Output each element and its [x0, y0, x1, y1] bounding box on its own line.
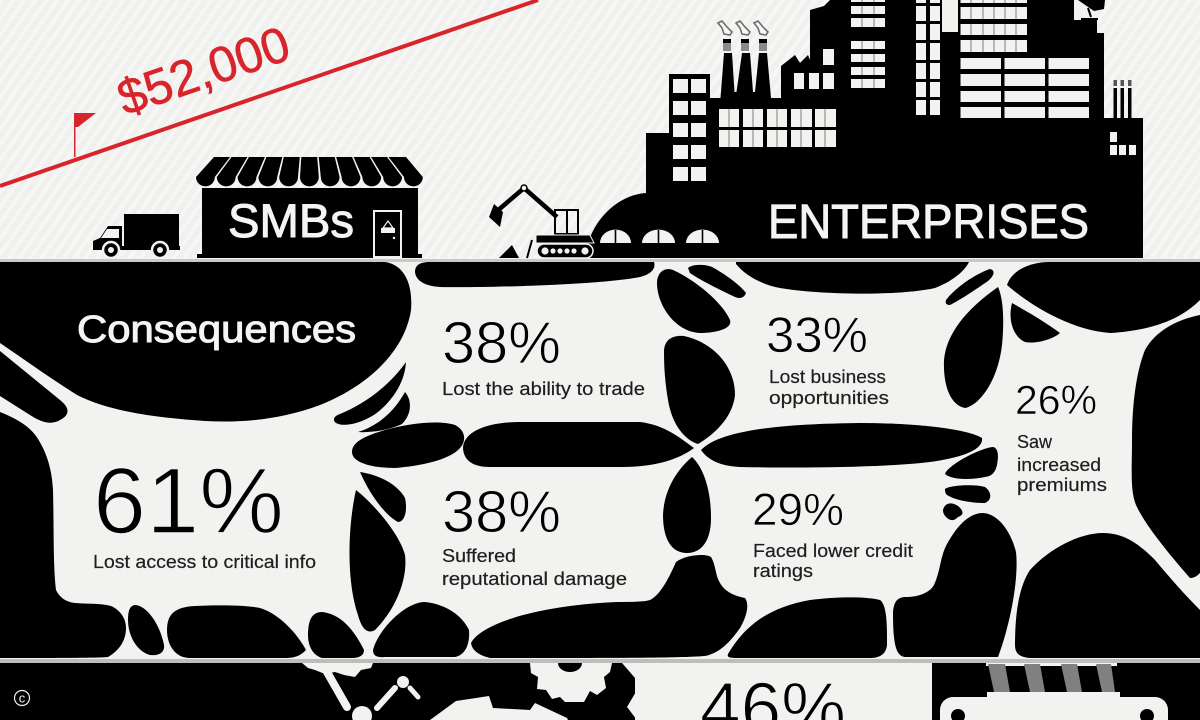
skyline windows — [600, 0, 1136, 243]
stat: 33% lost business opportunities: 33% — [766, 307, 868, 363]
large gear cut-out — [430, 696, 568, 720]
exhaust pipes — [1114, 80, 1132, 118]
label: SMBs: SMBs — [228, 194, 354, 247]
stat label: Faced lower credit — [753, 540, 913, 561]
off-white area edge — [622, 663, 637, 720]
icon: enterprise city skyline — [585, 0, 1143, 258]
shop awning — [196, 157, 423, 186]
stat label — [753, 540, 913, 581]
shop body — [202, 188, 418, 255]
stat: 29% faced lower credit ratings — [752, 484, 913, 581]
copyright mark — [14, 690, 30, 706]
stat: 26% saw increased premiums: 26% — [1015, 377, 1097, 423]
stat: 38% suffered reputational damage — [442, 479, 627, 589]
stat: 33% lost business opportunities — [766, 307, 889, 408]
panel: bottom black band with gears — [0, 663, 1200, 720]
stat label — [1017, 431, 1107, 495]
stat label: increased — [1017, 454, 1101, 475]
stone: consequences heading — [0, 262, 411, 422]
stat: 29% faced lower credit ratings: 29% — [752, 484, 844, 535]
satellite dish — [1074, 0, 1105, 20]
window mullions — [729, 0, 1016, 147]
heading: Consequences: Consequences — [77, 309, 356, 351]
icon: delivery truck — [93, 214, 180, 258]
stat: 26% saw increased premiums — [1015, 377, 1107, 495]
panel: consequences stone wall — [0, 262, 1200, 658]
stat: 38% lost the ability to trade — [442, 310, 645, 399]
icon: red flag — [74, 113, 96, 157]
skyline silhouette — [585, 0, 1143, 258]
stat: 38% suffered reputational damage: 38% — [442, 479, 561, 545]
stat label: premiums — [1017, 474, 1107, 495]
stat label — [769, 366, 889, 408]
stat label: opportunities — [769, 387, 889, 408]
copyright mark: c — [19, 690, 26, 706]
stat label: Lost business — [769, 366, 886, 387]
small gear cut-out — [530, 663, 612, 702]
red trend line with flag and value — [0, 0, 538, 186]
ground line — [0, 259, 1200, 262]
icon: SMB storefront — [196, 157, 423, 258]
stat label: Lost the ability to trade — [442, 378, 645, 399]
stat label: Lost access to critical info — [93, 551, 316, 572]
icon: excavator — [489, 185, 594, 258]
gear cog cut-out left — [302, 663, 373, 677]
chimney smoke — [718, 21, 768, 35]
stat label: ratings — [753, 560, 813, 581]
stat label — [442, 545, 627, 589]
stat: 38% lost the ability to trade: 38% — [442, 310, 561, 376]
stat label: reputational damage — [442, 568, 627, 589]
value: $52,000: $52,000 — [110, 16, 297, 126]
stat label: Suffered — [442, 545, 516, 566]
shop door — [374, 211, 401, 257]
label: ENTERPRISES: ENTERPRISES — [768, 196, 1089, 249]
stat label: Saw — [1017, 431, 1053, 452]
chimney tops — [723, 39, 767, 51]
machine plate icon — [940, 663, 1168, 720]
stat: 61% lost access to critical info: 61% — [93, 448, 284, 553]
bottom divider line — [0, 659, 1200, 663]
linkage arm and joints — [327, 672, 418, 708]
